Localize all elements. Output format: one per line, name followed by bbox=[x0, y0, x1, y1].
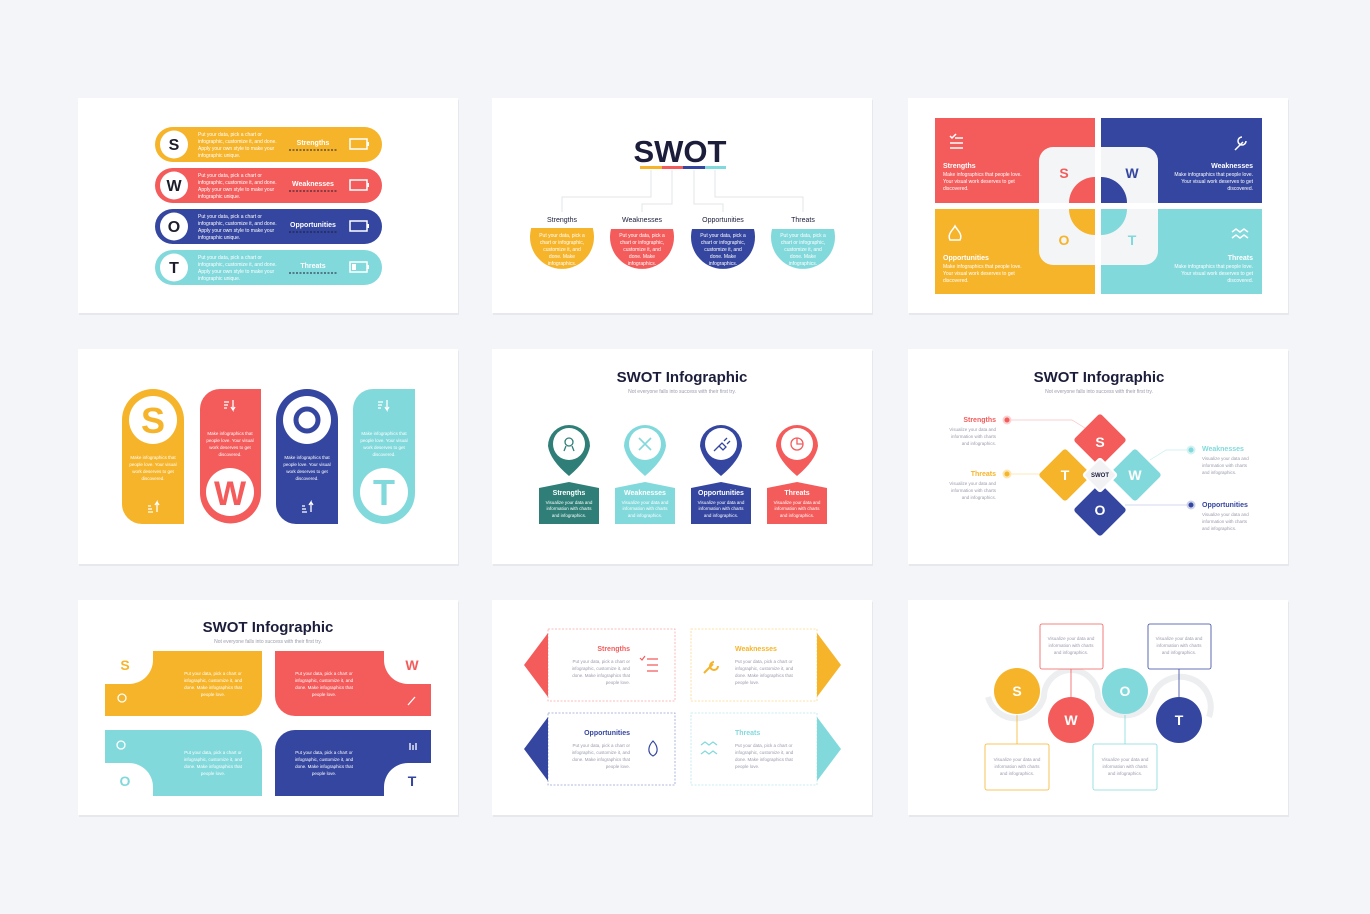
title SWOT: SWOT bbox=[634, 134, 727, 169]
panel: slide 3 quadrants: Your visual work deserves to get bbox=[1181, 179, 1254, 185]
panel: slide 3 quadrants: O bbox=[1059, 232, 1070, 248]
panel: slide 2 SWOT tree: Weaknesses bbox=[622, 217, 662, 224]
panel: slide 5 pins: Visualize your data and bbox=[698, 500, 745, 505]
half circles bbox=[531, 228, 593, 259]
panel: slide 7 four panels bbox=[105, 619, 431, 796]
panel: slide 5 pins: Strengths bbox=[553, 490, 585, 497]
panel: slide 6 diamond: and infographics. bbox=[1202, 470, 1236, 475]
panel: slide 2 SWOT tree: Put your data, pick a bbox=[619, 233, 665, 239]
panel: slide 6 diamond: Visualize your data and bbox=[949, 427, 996, 432]
panel: slide 2 SWOT tree: Opportunities bbox=[702, 217, 744, 224]
panel: slide 7 four panels: done. Make infographics that bbox=[184, 685, 243, 690]
panel: slide 3 quadrants: Your visual work deserves to get bbox=[1181, 271, 1254, 277]
panel: slide 6 diamond: Visualize your data and bbox=[949, 481, 996, 486]
panel: slide 4 vertical pills bbox=[122, 389, 415, 524]
panel: slide 6 diamond: information with charts bbox=[1202, 463, 1248, 468]
panel: slide 4 vertical pills: T bbox=[373, 472, 395, 513]
panel: slide 9 wave circles: Visualize your data and bbox=[1156, 636, 1203, 641]
panel: slide 7 four panels: done. Make infographics that bbox=[184, 764, 243, 769]
panel: slide 5 pins: information with charts bbox=[622, 506, 668, 511]
panel: slide 4 vertical pills: S bbox=[141, 400, 165, 441]
panel: slide 8 arrow boxes: infographic, customize it, and bbox=[735, 666, 794, 671]
panel: slide 8 arrow boxes: Strengths bbox=[597, 646, 630, 653]
panel: slide 2 SWOT tree: chart or infographic, bbox=[701, 240, 745, 246]
panel: slide 2 SWOT tree: Put your data, pick a bbox=[539, 233, 585, 239]
panel: slide 8 arrow boxes: Put your data, pick a chart or bbox=[735, 743, 793, 748]
panel: slide 7 four panels: done. Make infographics that bbox=[295, 764, 354, 769]
panel: slide 2 SWOT tree: customize it, and bbox=[623, 247, 661, 253]
panel: slide 2 SWOT tree: chart or infographic, bbox=[781, 240, 825, 246]
panel: slide 9 wave circles bbox=[985, 624, 1211, 790]
panel: slide 8 arrow boxes: Put your data, pick a chart or bbox=[735, 659, 793, 664]
panel: slide 9 wave circles: information with charts bbox=[994, 764, 1040, 769]
row: strengths: Put your data, pick a chart or bbox=[198, 132, 262, 138]
panel: slide 8 arrow boxes: Opportunities bbox=[584, 730, 630, 737]
panel: slide 3 quadrants: Your visual work deserves to get bbox=[943, 271, 1015, 277]
row: opportunities: O bbox=[168, 219, 180, 236]
row: opportunities: Opportunities bbox=[290, 222, 336, 229]
panel: slide 9 wave circles: information with charts bbox=[1156, 643, 1202, 648]
panel: slide 5 pins: information with charts bbox=[698, 506, 744, 511]
panel: slide 8 arrow boxes: done. Make infographics that bbox=[572, 757, 631, 762]
panel: slide 5 pins: Visualize your data and bbox=[546, 500, 593, 505]
panel: slide 2 SWOT tree: infographics. bbox=[709, 261, 737, 267]
panel: slide 5 pins: Visualize your data and bbox=[622, 500, 669, 505]
row: weaknesses bbox=[155, 168, 382, 203]
panel: slide 6 diamond: Strengths bbox=[963, 417, 996, 424]
panel: slide 8 arrow boxes: people love. bbox=[606, 764, 630, 769]
panel: slide 5 pins: Threats bbox=[784, 490, 810, 497]
panel: slide 9 wave circles: and infographics. bbox=[1162, 650, 1196, 655]
panel: slide 2 SWOT tree: done. Make bbox=[790, 254, 816, 260]
panel: slide 4 vertical pills: Make infographics that bbox=[130, 455, 176, 460]
panel: slide 2 SWOT tree: infographics. bbox=[548, 261, 576, 267]
panel: slide 7 four panels: people love. bbox=[312, 692, 336, 697]
panel: slide 4 vertical pills: people love. Your visual bbox=[129, 462, 177, 467]
panel: slide 8 arrow boxes: people love. bbox=[606, 680, 630, 685]
panel: slide 3 quadrants: Strengths bbox=[943, 163, 976, 170]
panel: slide 5 pins: Visualize your data and bbox=[774, 500, 821, 505]
panel: slide 4 vertical pills: people love. Your visual bbox=[360, 438, 408, 443]
panel: slide 3 quadrants: Make infographics that people love. bbox=[943, 264, 1022, 270]
panel: slide 7 four panels: SWOT Infographic bbox=[203, 619, 333, 636]
panel: slide 8 arrow boxes bbox=[524, 629, 841, 785]
panel: slide 2 SWOT tree: infographics. bbox=[789, 261, 817, 267]
panel: slide 8 arrow boxes: infographic, customize it, and bbox=[572, 666, 630, 671]
panel: slide 8 arrow boxes: Threats bbox=[735, 730, 760, 737]
panel: slide 6 diamond: S bbox=[1095, 434, 1105, 450]
panel: slide 1 pill rows bbox=[155, 127, 382, 285]
panel: slide 8 arrow boxes: people love. bbox=[735, 680, 759, 685]
panel: slide 6 diamond: W bbox=[1128, 467, 1142, 483]
panel: slide 3 quadrants: discovered. bbox=[943, 278, 969, 284]
panel: slide 7 four panels: T bbox=[408, 773, 417, 789]
row: opportunities: Apply your own style to make your bbox=[198, 228, 274, 234]
panel: slide 2 SWOT tree: Strengths bbox=[547, 217, 577, 224]
panel: slide 6 diamond: and infographics. bbox=[962, 495, 996, 500]
panel: slide 3 quadrants: Threats bbox=[1228, 255, 1253, 262]
panel: slide 6 diamond: Visualize your data and bbox=[1202, 456, 1249, 461]
panel: slide 2 SWOT tree: infographics. bbox=[628, 261, 656, 267]
panel: slide 6 diamond: information with charts bbox=[1202, 519, 1248, 524]
panel: slide 5 pins: Weaknesses bbox=[624, 490, 666, 497]
panel: slide 2 SWOT tree bbox=[530, 134, 835, 269]
panel: slide 8 arrow boxes: Weaknesses bbox=[735, 646, 777, 653]
panel: slide 9 wave circles: O bbox=[1120, 683, 1131, 699]
panel: slide 3 quadrants: Make infographics that people love. bbox=[1174, 172, 1253, 178]
panel: slide 4 vertical pills: discovered. bbox=[372, 452, 396, 457]
panel: slide 3 quadrants: discovered. bbox=[943, 186, 969, 192]
panel: slide 4 vertical pills: work deserves to get bbox=[209, 445, 252, 450]
panel: slide 4 vertical pills: discovered. bbox=[218, 452, 242, 457]
colored underline bbox=[640, 166, 726, 169]
panel: slide 4 vertical pills: Make infographics that bbox=[207, 431, 253, 436]
row: weaknesses: infographic, customize it, and done. bbox=[198, 180, 277, 186]
row: threats: Apply your own style to make your bbox=[198, 269, 274, 275]
panel: slide 2 SWOT tree: Threats bbox=[791, 217, 815, 224]
panel: slide 4 vertical pills: people love. Your visual bbox=[283, 462, 331, 467]
panel: slide 9 wave circles: Visualize your data and bbox=[1048, 636, 1095, 641]
panel: slide 9 wave circles: W bbox=[1064, 712, 1078, 728]
panel: slide 2 SWOT tree: chart or infographic, bbox=[540, 240, 584, 246]
panel: slide 4 vertical pills: work deserves to get bbox=[286, 469, 329, 474]
panel: slide 7 four panels: Put your data, pick a chart or bbox=[184, 750, 242, 755]
panel: slide 2 SWOT tree: Put your data, pick a bbox=[780, 233, 826, 239]
panel: slide 9 wave circles: information with charts bbox=[1048, 643, 1094, 648]
row: opportunities: infographic, customize it, and done. bbox=[198, 221, 277, 227]
row: opportunities bbox=[155, 209, 382, 244]
panel: slide 3 quadrants: Make infographics that people love. bbox=[1174, 264, 1253, 270]
panel: slide 2 SWOT tree: customize it, and bbox=[543, 247, 581, 253]
panel: slide 5 pins: Opportunities bbox=[698, 490, 744, 497]
panel: slide 7 four panels: Put your data, pick a chart or bbox=[295, 750, 353, 755]
row: opportunities: infographic unique. bbox=[198, 235, 240, 241]
panel: slide 7 four panels: infographic, customize it, and bbox=[295, 757, 354, 762]
panel: slide 3 quadrants: discovered. bbox=[1227, 186, 1253, 192]
panel: slide 3 quadrants: T bbox=[1128, 232, 1137, 248]
title: SWOT Infographic bbox=[617, 369, 747, 386]
slide backgrounds bbox=[78, 98, 1289, 817]
row: strengths: Strengths bbox=[297, 140, 329, 147]
panel: slide 8 arrow boxes: done. Make infographics that bbox=[572, 673, 631, 678]
row: threats bbox=[155, 250, 382, 285]
row: threats: infographic, customize it, and done. bbox=[198, 262, 277, 268]
panel: slide 2 SWOT tree: chart or infographic, bbox=[620, 240, 664, 246]
panel: slide 6 diamond: O bbox=[1095, 502, 1106, 518]
panel: slide 8 arrow boxes: infographic, customize it, and bbox=[735, 750, 794, 755]
panel: slide 7 four panels: infographic, customize it, and bbox=[184, 757, 243, 762]
panel: slide 4 vertical pills: Make infographics that bbox=[361, 431, 407, 436]
panel: slide 6 diamond: information with charts bbox=[951, 488, 997, 493]
panel: slide 3 quadrants: W bbox=[1125, 165, 1139, 181]
row: threats: Put your data, pick a chart or bbox=[198, 255, 262, 261]
panel: slide 6 diamond: SWOT bbox=[1091, 473, 1109, 479]
panel: slide 7 four panels: Put your data, pick a chart or bbox=[295, 671, 353, 676]
panel: slide 5 pins: and infographics. bbox=[704, 513, 738, 518]
panel: slide 3 quadrants: S bbox=[1059, 165, 1069, 181]
panel: slide 7 four panels: infographic, customize it, and bbox=[295, 678, 354, 683]
panel: slide 5 pins bbox=[539, 369, 827, 524]
panel: slide 6 diamond: Visualize your data and bbox=[1202, 512, 1249, 517]
panel: slide 4 vertical pills: work deserves to get bbox=[363, 445, 406, 450]
panel: slide 4 vertical pills: people love. Your visual bbox=[206, 438, 254, 443]
panel: slide 7 four panels: people love. bbox=[201, 692, 225, 697]
panel: slide 6 diamond bbox=[949, 369, 1249, 537]
row: strengths: Apply your own style to make your bbox=[198, 146, 274, 152]
panel: slide 8 arrow boxes: Put your data, pick a chart or bbox=[572, 743, 630, 748]
panel: slide 6 diamond: Not everyone falls into success with their first try. bbox=[1045, 389, 1153, 395]
panel: slide 2 SWOT tree: customize it, and bbox=[704, 247, 742, 253]
row: weaknesses: Apply your own style to make your bbox=[198, 187, 274, 193]
panel: slide 7 four panels: W bbox=[405, 657, 419, 673]
panel: slide 3 quadrants: Your visual work deserves to get bbox=[943, 179, 1015, 185]
panel: slide 9 wave circles: S bbox=[1012, 683, 1022, 699]
row: weaknesses: infographic unique. bbox=[198, 194, 240, 200]
panel: slide 9 wave circles: Visualize your data and bbox=[994, 757, 1041, 762]
panel: slide 2 SWOT tree: customize it, and bbox=[784, 247, 822, 253]
panel: slide 7 four panels: S bbox=[120, 657, 130, 673]
row: strengths bbox=[155, 127, 382, 162]
panel: slide 6 diamond: SWOT Infographic bbox=[1034, 369, 1164, 386]
panel: slide 3 quadrants: discovered. bbox=[1227, 278, 1253, 284]
panel: slide 2 SWOT tree: done. Make bbox=[710, 254, 736, 260]
panel: slide 9 wave circles: information with charts bbox=[1102, 764, 1148, 769]
row: strengths: infographic, customize it, and done. bbox=[198, 139, 277, 145]
panel: slide 7 four panels: Not everyone falls into success with their first try. bbox=[214, 639, 322, 645]
row: weaknesses: Weaknesses bbox=[292, 181, 334, 188]
row: threats: T bbox=[169, 260, 179, 277]
panel: slide 2 SWOT tree: done. Make bbox=[549, 254, 575, 260]
panel: slide 8 arrow boxes: infographic, customize it, and bbox=[572, 750, 630, 755]
panel: slide 6 diamond: and infographics. bbox=[962, 441, 996, 446]
panel: slide 9 wave circles: and infographics. bbox=[1054, 650, 1088, 655]
panel: slide 4 vertical pills: discovered. bbox=[141, 476, 165, 481]
panel: slide 4 vertical pills: discovered. bbox=[295, 476, 319, 481]
panel: slide 6 diamond: and infographics. bbox=[1202, 526, 1236, 531]
panel: slide 3 quadrants: Opportunities bbox=[943, 255, 989, 262]
panel: slide 3 quadrants: Weaknesses bbox=[1211, 163, 1253, 170]
panel: slide 6 diamond: Opportunities bbox=[1202, 502, 1248, 509]
panel: slide 9 wave circles: T bbox=[1175, 712, 1184, 728]
panel: slide 5 pins: Not everyone falls into success with their first try. bbox=[628, 389, 736, 395]
panel: slide 6 diamond: Threats bbox=[971, 471, 996, 478]
panel: slide 6 diamond: information with charts bbox=[951, 434, 997, 439]
panel: slide 9 wave circles: Visualize your data and bbox=[1102, 757, 1149, 762]
panel: slide 8 arrow boxes: Put your data, pick a chart or bbox=[572, 659, 630, 664]
row: strengths: infographic unique. bbox=[198, 153, 240, 159]
panel: slide 8 arrow boxes: done. Make infographics that bbox=[735, 673, 794, 678]
row: weaknesses: W bbox=[166, 178, 182, 195]
panel: slide 7 four panels: infographic, customize it, and bbox=[184, 678, 243, 683]
panel: slide 4 vertical pills: work deserves to get bbox=[132, 469, 175, 474]
panel: slide 2 SWOT tree: Put your data, pick a bbox=[700, 233, 746, 239]
row: strengths: S bbox=[169, 137, 180, 154]
panel: slide 5 pins: and infographics. bbox=[780, 513, 814, 518]
panel: slide 8 arrow boxes: done. Make infographics that bbox=[735, 757, 794, 762]
panel: slide 5 pins: and infographics. bbox=[628, 513, 662, 518]
panel: slide 6 diamond: T bbox=[1061, 467, 1070, 483]
panel: slide 4 vertical pills: Make infographics that bbox=[284, 455, 330, 460]
row: threats: Threats bbox=[300, 263, 326, 270]
panel: slide 8 arrow boxes: people love. bbox=[735, 764, 759, 769]
panel: slide 5 pins: information with charts bbox=[774, 506, 820, 511]
panel: slide 9 wave circles: and infographics. bbox=[1108, 771, 1142, 776]
panel: slide 5 pins: information with charts bbox=[546, 506, 592, 511]
panel: slide 7 four panels: Put your data, pick a chart or bbox=[184, 671, 242, 676]
panel: slide 3 quadrants: Make infographics that people love. bbox=[943, 172, 1022, 178]
panel: slide 6 diamond: Weaknesses bbox=[1202, 446, 1244, 453]
panel: slide 3 quadrants bbox=[930, 110, 1270, 300]
panel: slide 7 four panels: done. Make infographics that bbox=[295, 685, 354, 690]
panel: slide 9 wave circles: and infographics. bbox=[1000, 771, 1034, 776]
panel: slide 5 pins: and infographics. bbox=[552, 513, 586, 518]
panel: slide 7 four panels: people love. bbox=[201, 771, 225, 776]
panel: slide 4 vertical pills: W bbox=[214, 475, 247, 513]
row: threats: infographic unique. bbox=[198, 276, 240, 282]
panel: slide 7 four panels: O bbox=[120, 773, 131, 789]
panel: slide 2 SWOT tree: done. Make bbox=[629, 254, 655, 260]
row: opportunities: Put your data, pick a chart or bbox=[198, 214, 262, 220]
row: weaknesses: Put your data, pick a chart or bbox=[198, 173, 262, 179]
panel: slide 7 four panels: people love. bbox=[312, 771, 336, 776]
